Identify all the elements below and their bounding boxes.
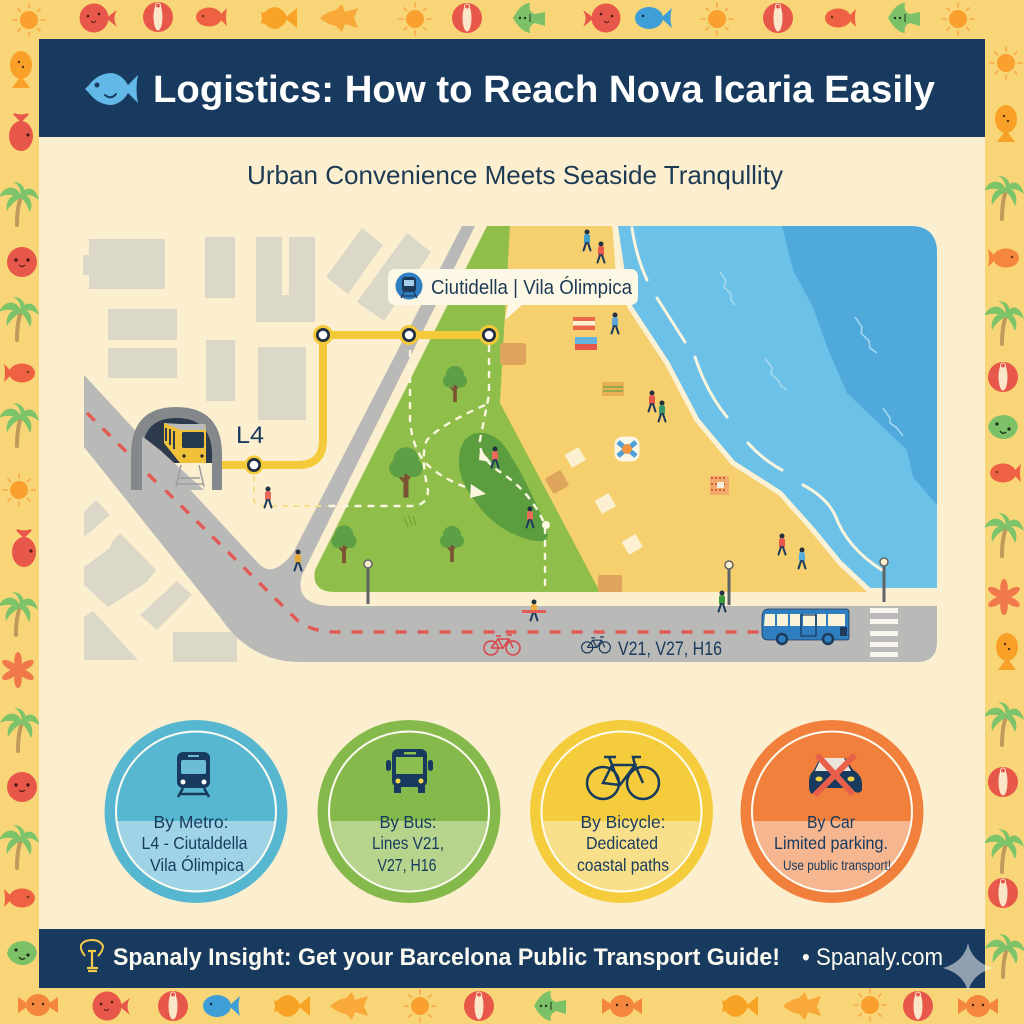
pedestrian [658,400,666,422]
lamp post [725,561,733,605]
icon: orange fish [261,7,297,29]
road [84,226,937,662]
bus [762,609,849,644]
icon: sun [3,474,35,506]
metro stations [244,325,499,474]
metro text [142,812,248,875]
metro line L4 [205,335,489,465]
footer website: • Spanaly.com [802,944,943,971]
icon: beach ball [143,2,173,32]
tree [443,366,467,402]
icon: sun [854,989,886,1021]
metro text: L4 - Ciutaldella [142,833,248,853]
icon: blue fish [635,7,672,29]
transport option: metro [104,720,288,903]
icon: blue bicycle [582,637,610,653]
footer banner [39,929,985,988]
icon: green fish [513,3,545,33]
icon: palm [984,702,1024,745]
icon: red puffer fish [583,4,620,32]
pedestrian [526,506,534,528]
station callout [388,269,638,320]
icon: red puffer fish [80,4,117,32]
icon: sun fish [399,3,431,35]
icon: red face [7,772,37,802]
crosswalk [870,608,898,657]
bicycle text: By Bicycle: [580,812,666,832]
line label L4: L4 [236,422,264,449]
icon: red fish [196,8,227,26]
path arrowheads [470,449,550,529]
bus text: Lines V21, [372,833,444,853]
icon: palm [0,182,39,225]
icon: sun [942,3,974,35]
icon: red fish [825,8,856,28]
bus text: By Bus: [380,812,436,832]
pedestrian [598,242,604,262]
icon: palm [0,403,39,446]
pedestrian [492,446,498,468]
icon: metro train [177,752,210,797]
icon: red bicycle [484,635,520,655]
icon: light bulb [81,940,103,971]
icon: red fish [4,888,35,908]
bicycle text: Dedicated [586,833,658,853]
icon: flower [987,579,1021,615]
pedestrians [264,230,806,620]
icon: sun [990,47,1022,79]
striped towels [573,317,597,350]
pedestrian [718,590,726,612]
pedestrian [798,548,806,568]
icon: orange fish [602,995,642,1017]
train [164,423,206,487]
picnic blanket [710,476,729,495]
car text: By Car [807,812,855,832]
icon: red puffer fish [92,992,130,1020]
bike lane [87,413,760,632]
icon: beach ball [988,362,1018,392]
icon: beach ball [452,3,482,33]
icon: sun [701,3,733,35]
border: right icon column [984,47,1024,977]
border: bottom icon row [18,989,998,1022]
icon: bicycle [587,757,659,799]
icon: beach ball [464,991,494,1021]
pedestrian [584,230,590,250]
icon: sun [13,4,45,36]
icon: orange fish [274,995,310,1017]
wave marks [720,272,903,436]
sign bar at crossing [522,610,546,613]
icon: red fish [4,364,35,382]
icon: orange fish [18,994,58,1016]
title text: Logistics: How to Reach Nova Icaria Easily [153,69,935,111]
icon: beach ball [903,991,933,1021]
metro walking link [254,476,327,506]
pedestrian [612,312,618,334]
pedestrian [264,486,272,508]
lamp post [880,558,888,602]
lifebuoy [614,436,640,462]
icon: orange fish [783,992,821,1020]
icon: beach ball [988,878,1018,908]
bus text: V27, H16 [378,855,436,875]
foam lines [632,228,882,570]
shoreline [615,226,870,591]
transport option: car [740,720,924,903]
metro tunnel [131,407,222,490]
icon: palm [984,176,1024,219]
lamp post [364,560,372,604]
pedestrian [530,600,538,620]
icon: beach ball [158,991,188,1021]
icon: orange fish [10,51,32,88]
metro text: Vila Ólimpica [150,854,244,875]
icon: sun [404,990,436,1022]
icon: palm [0,708,40,751]
dark green garden [459,433,548,541]
map [83,226,937,662]
tree [440,526,464,562]
icon: orange fish [722,995,758,1017]
icon: beach ball [988,767,1018,797]
border: top icon row [13,2,974,36]
pedestrian [778,534,786,554]
icon: orange fish [958,995,998,1017]
icon: blue fish [85,73,138,105]
icon: green lime fish [988,415,1018,439]
station name: Ciutidella | Vila Ólimpica [431,276,633,299]
icon: red pear fish [12,530,36,567]
icon: palm [984,301,1024,344]
icon: palm [984,513,1024,556]
icon: blue fish [203,995,240,1017]
tracks [176,465,204,487]
metro text: By Metro: [154,812,228,832]
bus lines label: V21, V27, H16 [618,639,722,660]
sparkle mark [943,943,993,992]
sea [618,226,937,588]
transport option: bicycle [530,720,713,903]
icon: palm [0,297,39,340]
bus text [372,812,444,875]
bicycle text [577,812,669,875]
pedestrian [294,550,302,570]
icon: orange fish [320,4,358,32]
icon: orange fish [995,105,1017,142]
transport option: bus [318,720,500,903]
car text: Use public transport! [783,857,891,873]
border: left icon column [0,51,40,965]
bicycle text: coastal paths [577,855,669,875]
park grass marks [404,515,416,527]
icon: metro badge [396,272,422,300]
icon: green fish [534,991,566,1021]
tree [331,525,357,563]
icon: palm [984,829,1024,872]
beach mats [565,447,643,555]
icon: crossed-out car [809,755,862,795]
bench [602,382,624,396]
walking paths [327,345,545,590]
icon: orange fish [996,633,1018,670]
city buildings [83,228,431,662]
car text [774,812,891,873]
icon: red fish [990,464,1021,482]
subtitle: Urban Convenience Meets Seaside Tranqullity [247,160,783,190]
sand beach [500,226,870,592]
icon: bus [386,749,433,793]
icon: red face [7,247,37,277]
icon: beach ball [763,3,793,33]
footer call to action: Spanaly Insight: Get your Barcelona Public Transport Guide! [113,944,780,971]
green park [314,226,600,592]
icon: orange fish [330,992,368,1020]
beach huts [500,343,622,592]
icon: orange fish [988,248,1019,268]
icon: green fish [888,3,920,33]
icon: palm [0,825,39,868]
icon: flower [1,652,35,688]
icon: palm [985,934,1024,977]
icon: palm [0,592,38,635]
deep water [782,226,937,505]
title banner [39,39,985,137]
icon: green lime fish [7,941,37,965]
pedestrian [648,390,656,412]
icon: red pear fish [9,114,33,151]
tree [389,447,423,498]
car text: Limited parking. [774,833,888,853]
